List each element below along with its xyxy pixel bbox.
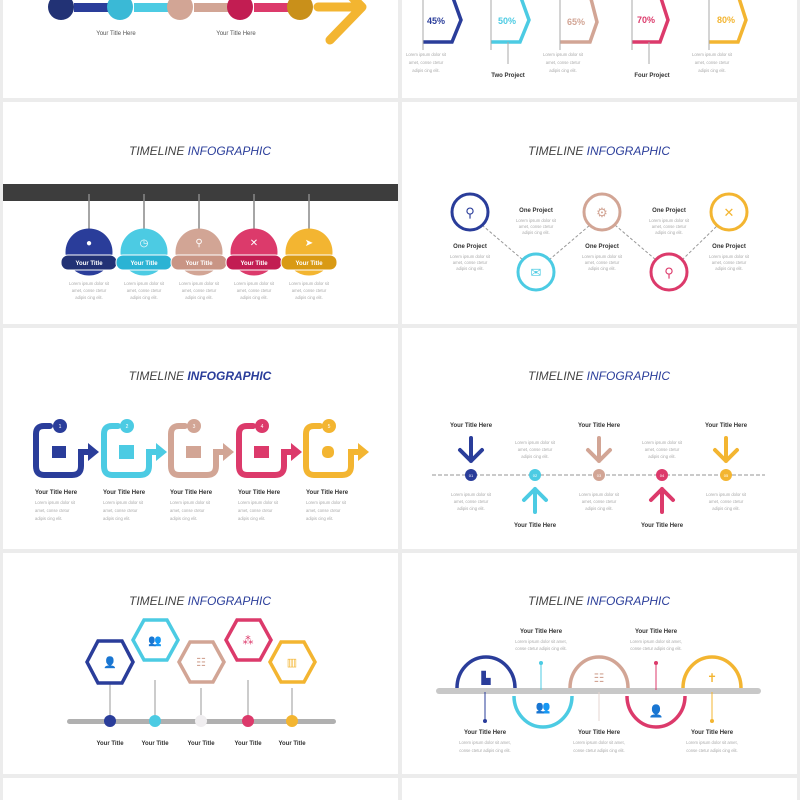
panel: arrow timeline: 02 bbox=[533, 473, 538, 478]
arrow bbox=[318, 0, 362, 40]
panel: hexagon timeline: 👥 bbox=[148, 635, 162, 647]
panel: rounded arrow steps: Lorem ipsum dolor sit bbox=[103, 500, 144, 505]
panel: hanging domes: amet, conse ctetur bbox=[127, 288, 162, 293]
panel: arch wave timeline: Your Title Here bbox=[464, 730, 507, 736]
panel: hanging domes: ◷ bbox=[140, 238, 149, 249]
panel: zigzag circles: ⚙ bbox=[596, 205, 608, 220]
panel: arrow timeline: Your Title Here bbox=[705, 423, 748, 429]
panel: zigzag circles: One Project bbox=[453, 244, 487, 250]
panel: rounded arrow steps: adipis cing elit. bbox=[35, 516, 62, 521]
title: TIMELINE INFOGRAPHIC bbox=[528, 369, 670, 383]
panel: zigzag circles: Lorem ipsum dolor sit bbox=[709, 254, 750, 259]
panel: zigzag circles: Lorem ipsum dolor sit bbox=[516, 218, 557, 223]
panel: arrow timeline: 05 bbox=[724, 473, 729, 478]
panel: arrow timeline: amet, conse ctetur bbox=[582, 499, 617, 504]
panel: rounded arrow steps: Lorem ipsum dolor sit bbox=[238, 500, 279, 505]
panel: top-right flags: 45% bbox=[427, 16, 445, 26]
panel: hexagon timeline: Your Title bbox=[141, 741, 169, 747]
panel: arch wave timeline: conse ctetur adipis cing elit. bbox=[630, 646, 682, 651]
panel: arrow timeline: 03 bbox=[597, 473, 602, 478]
panel: arch wave timeline: Your Title Here bbox=[635, 629, 678, 635]
panel: zigzag circles: amet, conse ctetur bbox=[712, 260, 747, 265]
panel: arrow timeline: amet, conse ctetur bbox=[645, 447, 680, 452]
panel: rounded arrow steps: adipis cing elit. bbox=[170, 516, 197, 521]
panel: top-right flags: Lorem ipsum dolor sit bbox=[406, 52, 447, 57]
panel: hanging domes: adipis cing elit. bbox=[185, 295, 213, 300]
panel: arch wave timeline: Lorem ipsum dolor sit amet, bbox=[630, 639, 682, 644]
panel: hanging domes: amet, conse ctetur bbox=[237, 288, 272, 293]
panel: zigzag circles: adipis cing elit. bbox=[456, 266, 484, 271]
panel: hanging domes: amet, conse ctetur bbox=[72, 288, 107, 293]
panel: arch wave timeline: ▙ bbox=[480, 670, 491, 685]
panel: hexagon timeline: 👤 bbox=[103, 656, 117, 669]
panel: arch wave timeline: conse ctetur adipis cing elit. bbox=[459, 748, 511, 753]
panel: zigzag circles: adipis cing elit. bbox=[655, 230, 683, 235]
panel: arch wave timeline: Your Title Here bbox=[691, 730, 734, 736]
panel: arrow timeline: adipis cing elit. bbox=[648, 454, 676, 459]
title: TIMELINE INFOGRAPHIC bbox=[129, 144, 271, 158]
panel: hanging domes: Lorem ipsum dolor sit bbox=[234, 281, 275, 286]
title: TIMELINE INFOGRAPHIC bbox=[528, 594, 670, 608]
panel: rounded arrow steps: amet, conse ctetur bbox=[238, 508, 273, 513]
panel: arrow timeline: 04 bbox=[660, 473, 665, 478]
panel: zigzag circles: One Project bbox=[712, 244, 746, 250]
panel: hanging domes: adipis cing elit. bbox=[240, 295, 268, 300]
panel: arrow timeline: Lorem ipsum dolor sit bbox=[451, 492, 492, 497]
panel: hanging domes: Lorem ipsum dolor sit bbox=[179, 281, 220, 286]
panel: hanging domes: ➤ bbox=[305, 238, 313, 249]
panel: rounded arrow steps bbox=[35, 369, 369, 521]
panel: arrow timeline: Lorem ipsum dolor sit bbox=[579, 492, 620, 497]
title: TIMELINE INFOGRAPHIC bbox=[528, 144, 670, 158]
panel: top-right flags: 65% bbox=[567, 17, 585, 27]
panel: hanging domes: Your Title bbox=[295, 261, 323, 267]
panel: hanging domes: ⚲ bbox=[195, 238, 203, 249]
panel: hexagon timeline: Your Title bbox=[278, 741, 306, 747]
panel: zigzag circles: adipis cing elit. bbox=[588, 266, 616, 271]
panel: hanging domes: Your Title bbox=[130, 261, 158, 267]
panel: hanging domes: ● bbox=[86, 238, 92, 249]
panel: top-right flags: amet, conse ctetur bbox=[409, 60, 444, 65]
panel: hanging domes: Lorem ipsum dolor sit bbox=[289, 281, 330, 286]
panel: hanging domes: Lorem ipsum dolor sit bbox=[124, 281, 165, 286]
panel: arrow timeline: Lorem ipsum dolor sit bbox=[706, 492, 747, 497]
panel: arch wave timeline: ☷ bbox=[594, 671, 604, 685]
panel: top-left circle timeline: Your Title Here bbox=[96, 31, 136, 37]
panel: rounded arrow steps: 2 bbox=[126, 424, 129, 430]
panel: rounded arrow steps: adipis cing elit. bbox=[306, 516, 333, 521]
panel: hanging domes: adipis cing elit. bbox=[75, 295, 103, 300]
panel: zigzag circles: One Project bbox=[519, 208, 553, 214]
panel: top-right flags: adipis cing elit. bbox=[549, 68, 577, 73]
panel: top-right flags: amet, conse ctetur bbox=[695, 60, 730, 65]
title: TIMELINE INFOGRAPHIC bbox=[129, 369, 272, 383]
panel: zigzag circles: adipis cing elit. bbox=[522, 230, 550, 235]
panel: zigzag circles: Lorem ipsum dolor sit bbox=[450, 254, 491, 259]
panel: zigzag circles: amet, conse ctetur bbox=[519, 224, 554, 229]
panel: top-right flags: Two Project bbox=[491, 73, 525, 79]
panel: rounded arrow steps: Your Title Here bbox=[306, 490, 349, 496]
panel: top-right flags: Four Project bbox=[634, 73, 670, 79]
panel: arch wave timeline: conse ctetur adipis cing elit. bbox=[515, 646, 567, 651]
panel: top-right flags: Lorem ipsum dolor sit bbox=[692, 52, 733, 57]
panel: zigzag circles: amet, conse ctetur bbox=[453, 260, 488, 265]
panel: hanging domes: Your Title bbox=[185, 261, 213, 267]
panel: arch wave timeline: Lorem ipsum dolor sit amet, bbox=[515, 639, 567, 644]
panel: zigzag circles bbox=[450, 144, 750, 290]
panel: hexagon timeline: ▥ bbox=[287, 657, 297, 669]
panel: arch wave timeline: Lorem ipsum dolor sit amet, bbox=[686, 740, 738, 745]
panel: top-right flags: adipis cing elit. bbox=[412, 68, 440, 73]
panel: zigzag circles: One Project bbox=[585, 244, 619, 250]
panel: top-right flags: Lorem ipsum dolor sit bbox=[543, 52, 584, 57]
panel: zigzag circles: ✕ bbox=[724, 205, 734, 220]
panel: arrow timeline: adipis cing elit. bbox=[521, 454, 549, 459]
panel: rounded arrow steps: amet, conse ctetur bbox=[35, 508, 70, 513]
panel: rounded arrow steps: adipis cing elit. bbox=[238, 516, 265, 521]
title: TIMELINE INFOGRAPHIC bbox=[129, 594, 271, 608]
panel: rounded arrow steps: 4 bbox=[261, 424, 264, 430]
panel: arrow timeline: amet, conse ctetur bbox=[518, 447, 553, 452]
panel: rounded arrow steps: Your Title Here bbox=[238, 490, 281, 496]
panel: hanging domes: adipis cing elit. bbox=[130, 295, 158, 300]
panel: zigzag circles: amet, conse ctetur bbox=[585, 260, 620, 265]
panel: zigzag circles: One Project bbox=[652, 208, 686, 214]
panel: rounded arrow steps: amet, conse ctetur bbox=[170, 508, 205, 513]
panel: arch wave timeline: Lorem ipsum dolor sit amet, bbox=[573, 740, 625, 745]
panel: rounded arrow steps: 5 bbox=[328, 424, 331, 430]
panel: rounded arrow steps: 3 bbox=[193, 424, 196, 430]
panel: hanging domes: amet, conse ctetur bbox=[292, 288, 327, 293]
panel: arrow timeline: Lorem ipsum dolor sit bbox=[642, 440, 683, 445]
panel: arrow timeline: Your Title Here bbox=[578, 423, 621, 429]
panel: rounded arrow steps: amet, conse ctetur bbox=[306, 508, 341, 513]
panel: arch wave timeline bbox=[436, 594, 761, 753]
panel: zigzag circles: ⚲ bbox=[664, 265, 674, 280]
panel: zigzag circles: ✉ bbox=[531, 265, 542, 280]
panel: rounded arrow steps: adipis cing elit. bbox=[103, 516, 130, 521]
panel: hanging domes: adipis cing elit. bbox=[295, 295, 323, 300]
panel: hexagon timeline: ⁂ bbox=[242, 635, 254, 647]
panel: rounded arrow steps: amet, conse ctetur bbox=[103, 508, 138, 513]
panel: arrow timeline: Your Title Here bbox=[514, 523, 557, 529]
panel: top-right flags: 50% bbox=[498, 16, 516, 26]
panel: arch wave timeline: Lorem ipsum dolor sit amet, bbox=[459, 740, 511, 745]
panel: hexagon timeline bbox=[67, 594, 336, 747]
panel: hanging domes: Your Title bbox=[75, 261, 103, 267]
panel: hexagon timeline: Your Title bbox=[187, 741, 215, 747]
panel: zigzag circles: ⚲ bbox=[465, 205, 475, 220]
panel: arch wave timeline: conse ctetur adipis cing elit. bbox=[573, 748, 625, 753]
panel: top-right flags: 70% bbox=[637, 15, 655, 25]
panel: top-right flags: 80% bbox=[717, 15, 735, 25]
panel: arrow timeline bbox=[432, 369, 765, 529]
panel: rounded arrow steps: Your Title Here bbox=[170, 490, 213, 496]
panel: top-right flags: adipis cing elit. bbox=[698, 68, 726, 73]
panel: arrow timeline: Your Title Here bbox=[641, 523, 684, 529]
panel: arch wave timeline: 👤 bbox=[649, 704, 663, 718]
panel: top-left circle timeline bbox=[48, 0, 362, 40]
panel: top-right flags: amet, conse ctetur bbox=[546, 60, 581, 65]
panel: arrow timeline: adipis cing elit. bbox=[585, 506, 613, 511]
panel: arrow timeline: amet, conse ctetur bbox=[454, 499, 489, 504]
panel: zigzag circles: amet, conse ctetur bbox=[652, 224, 687, 229]
panel: hanging domes: ✕ bbox=[250, 238, 258, 249]
panel: arch wave timeline: ✝ bbox=[707, 671, 717, 685]
panel: hexagon timeline: Your Title bbox=[96, 741, 124, 747]
panel: zigzag circles: adipis cing elit. bbox=[715, 266, 743, 271]
panel: rounded arrow steps: 1 bbox=[59, 424, 62, 430]
panel: hexagon timeline: Your Title bbox=[234, 741, 262, 747]
panel: top-left circle timeline: Your Title Here bbox=[216, 31, 256, 37]
panel: hexagon timeline: ☷ bbox=[196, 657, 206, 669]
panel: hanging domes bbox=[3, 144, 398, 300]
panel: arch wave timeline: Your Title Here bbox=[520, 629, 563, 635]
panel: arch wave timeline: conse ctetur adipis cing elit. bbox=[686, 748, 738, 753]
panel: zigzag circles: Lorem ipsum dolor sit bbox=[582, 254, 623, 259]
panel: arrow timeline: amet, conse ctetur bbox=[709, 499, 744, 504]
panel: hanging domes: Your Title bbox=[240, 261, 268, 267]
panel: rounded arrow steps: Lorem ipsum dolor sit bbox=[170, 500, 211, 505]
panel: arrow timeline: adipis cing elit. bbox=[457, 506, 485, 511]
panel: arrow timeline: 01 bbox=[469, 473, 474, 478]
panel: rounded arrow steps: Lorem ipsum dolor sit bbox=[306, 500, 347, 505]
panel: rounded arrow steps: Your Title Here bbox=[35, 490, 78, 496]
panel: rounded arrow steps: Lorem ipsum dolor sit bbox=[35, 500, 76, 505]
panel: hanging domes: Lorem ipsum dolor sit bbox=[69, 281, 110, 286]
panel: arrow timeline: adipis cing elit. bbox=[712, 506, 740, 511]
panel: arch wave timeline: 👥 bbox=[536, 700, 551, 714]
panel: rounded arrow steps: Your Title Here bbox=[103, 490, 146, 496]
panel: arch wave timeline: Your Title Here bbox=[578, 730, 621, 736]
panel: hanging domes: amet, conse ctetur bbox=[182, 288, 217, 293]
panel: top-right flags bbox=[406, 0, 746, 79]
panel: arrow timeline: Your Title Here bbox=[450, 423, 493, 429]
panel: zigzag circles: Lorem ipsum dolor sit bbox=[649, 218, 690, 223]
panel: arrow timeline: Lorem ipsum dolor sit bbox=[515, 440, 556, 445]
